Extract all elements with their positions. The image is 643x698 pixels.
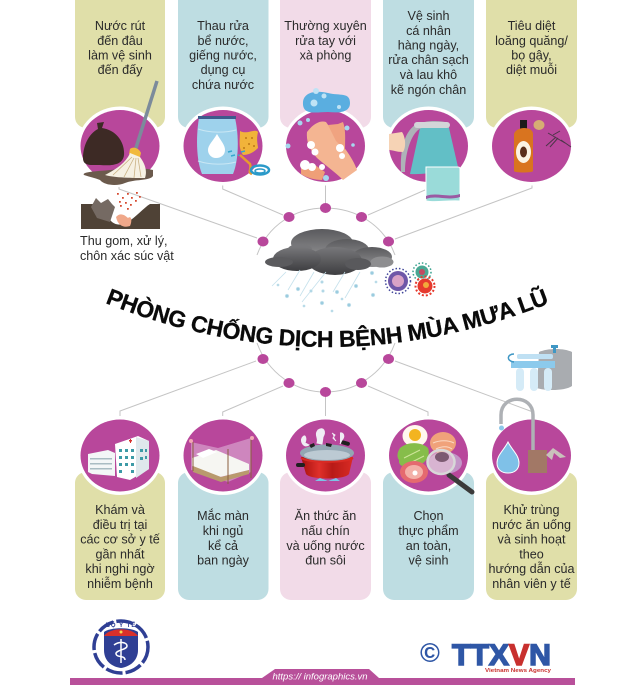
advice text: bể nước, [198, 34, 248, 48]
advice text: đến đấy [98, 63, 143, 77]
advice text: điều trị tại [93, 518, 147, 532]
advice text: dụng cụ [201, 63, 245, 77]
logo: Ministry of Health: BỘ Y TẾ [106, 621, 136, 629]
advice text: Mắc màn [197, 508, 249, 523]
panel: wash water containers [178, 0, 269, 186]
advice text: bọ gậy, [511, 48, 552, 62]
advice text: kẽ ngón chân [391, 83, 466, 97]
panel: medical care [75, 416, 165, 600]
icon circle [283, 416, 368, 495]
card [383, 0, 474, 128]
advice text: đến đâu [97, 34, 143, 48]
caption: Thu gom, xử lý, [80, 234, 168, 248]
advice text: đun sôi [305, 554, 346, 568]
advice text: Thường xuyên [284, 19, 367, 33]
advice text: rửa tay với [295, 34, 356, 48]
card [280, 472, 371, 600]
icon: rain drops [272, 270, 377, 312]
icon: washing hands [286, 118, 357, 181]
icon circle [78, 106, 162, 186]
icon circle [489, 106, 574, 186]
connector lines and node ring [119, 183, 533, 416]
advice text: Thau rửa [197, 19, 249, 33]
advice text: rửa chân sạch [388, 53, 469, 67]
advice text: khi nghi ngờ [85, 562, 155, 576]
ring nodes [258, 203, 394, 397]
advice text: gần nhất [95, 548, 145, 562]
icon: rain cloud [265, 229, 394, 275]
panel: water purifier [508, 345, 572, 391]
copyright mark: © [420, 638, 440, 668]
advice text: theo [519, 548, 544, 562]
card [486, 472, 577, 600]
panel: hand washing [280, 0, 371, 186]
icon circle [283, 106, 368, 186]
advice text: an toàn, [406, 539, 451, 553]
advice text: loăng quăng/ [495, 34, 568, 48]
advice text: nước ăn uống [492, 518, 571, 532]
icon: garbage bag and mop [83, 81, 157, 185]
advice text: chứa nước [192, 78, 254, 92]
icon circle [180, 416, 266, 495]
agency name: TTXVN [452, 639, 551, 672]
advice text: Ăn thức ăn [295, 508, 356, 523]
icon: soap sponge [303, 88, 350, 113]
panel: cooked food and boiled water [280, 416, 371, 600]
card [383, 472, 474, 600]
footer url: https:// infographics.vn [272, 672, 368, 682]
icon: boiling pot [296, 429, 354, 481]
footer bar [70, 669, 575, 685]
panel: personal hygiene [383, 0, 474, 202]
advice text: nhiễm bệnh [87, 576, 153, 591]
advice text: nhân viên y tế [492, 577, 571, 591]
icon circle [78, 416, 162, 495]
advice text: khi ngủ [203, 524, 243, 538]
advice text: Khử trùng [503, 503, 560, 517]
advice text: cá nhân [406, 24, 451, 38]
advice text: kể cả [208, 539, 238, 553]
panel: mosquito net [178, 416, 268, 600]
advice text: Chọn [413, 509, 444, 523]
logo: TTXVN [420, 638, 552, 674]
advice text: các cơ sở y tế [80, 532, 160, 546]
advice text: Vệ sinh [407, 9, 450, 23]
advice text: ban ngày [197, 554, 250, 568]
advice text: Tiêu diệt [508, 19, 556, 33]
panel: flood clean-up [75, 0, 165, 186]
card [486, 0, 577, 128]
advice text: và lau khô [400, 68, 457, 82]
panel: water disinfection [486, 399, 577, 600]
icon: tap, water drop and chlorine tablets [497, 399, 566, 473]
advice text: xà phòng [300, 48, 351, 62]
advice text: hướng dẫn của [488, 561, 575, 576]
card [75, 472, 165, 600]
advice text: nấu chín [301, 524, 350, 538]
icon: shower head, hand and towel [389, 121, 460, 202]
card [178, 0, 268, 128]
icon: barrel, sponge and hose [197, 116, 269, 174]
advice text: diệt muỗi [506, 62, 557, 77]
advice text: Nước rút [95, 19, 146, 33]
advice text: làm vệ sinh [88, 48, 152, 62]
icon: viruses [386, 263, 434, 296]
panel: kill larvae and mosquitoes [486, 0, 577, 186]
agency subtitle: Vietnam News Agency [485, 668, 552, 674]
icon: burial pit [81, 192, 160, 229]
icon circle [180, 106, 266, 186]
icon: insecticide spray and mosquito [514, 120, 571, 172]
advice text: vệ sinh [409, 554, 448, 568]
icon: bed with mosquito net [189, 436, 254, 484]
advice text: hàng ngày, [398, 38, 459, 52]
caption: chôn xác súc vật [80, 249, 174, 263]
icon circle [386, 416, 471, 495]
card [280, 0, 371, 128]
panel: animal burial [80, 192, 174, 263]
icon circle [386, 106, 471, 186]
title: PHÒNG CHỐNG DỊCH BỆNH MÙA MƯA LŨ [106, 285, 547, 350]
card [75, 0, 165, 128]
advice text: và sinh hoạt [498, 532, 566, 546]
card [178, 472, 268, 600]
icon: hospital buildings [88, 436, 149, 480]
icon: food and magnifier [397, 425, 472, 492]
advice text: Khám và [95, 503, 145, 517]
logo: Ministry of Health [94, 621, 148, 673]
panel: safe food [383, 416, 474, 600]
icon: water filter [508, 345, 572, 391]
advice text: và uống nước [286, 539, 365, 553]
advice text: giếng nước, [189, 48, 257, 62]
icon circle [489, 416, 574, 495]
advice text: thực phẩm [398, 524, 459, 538]
